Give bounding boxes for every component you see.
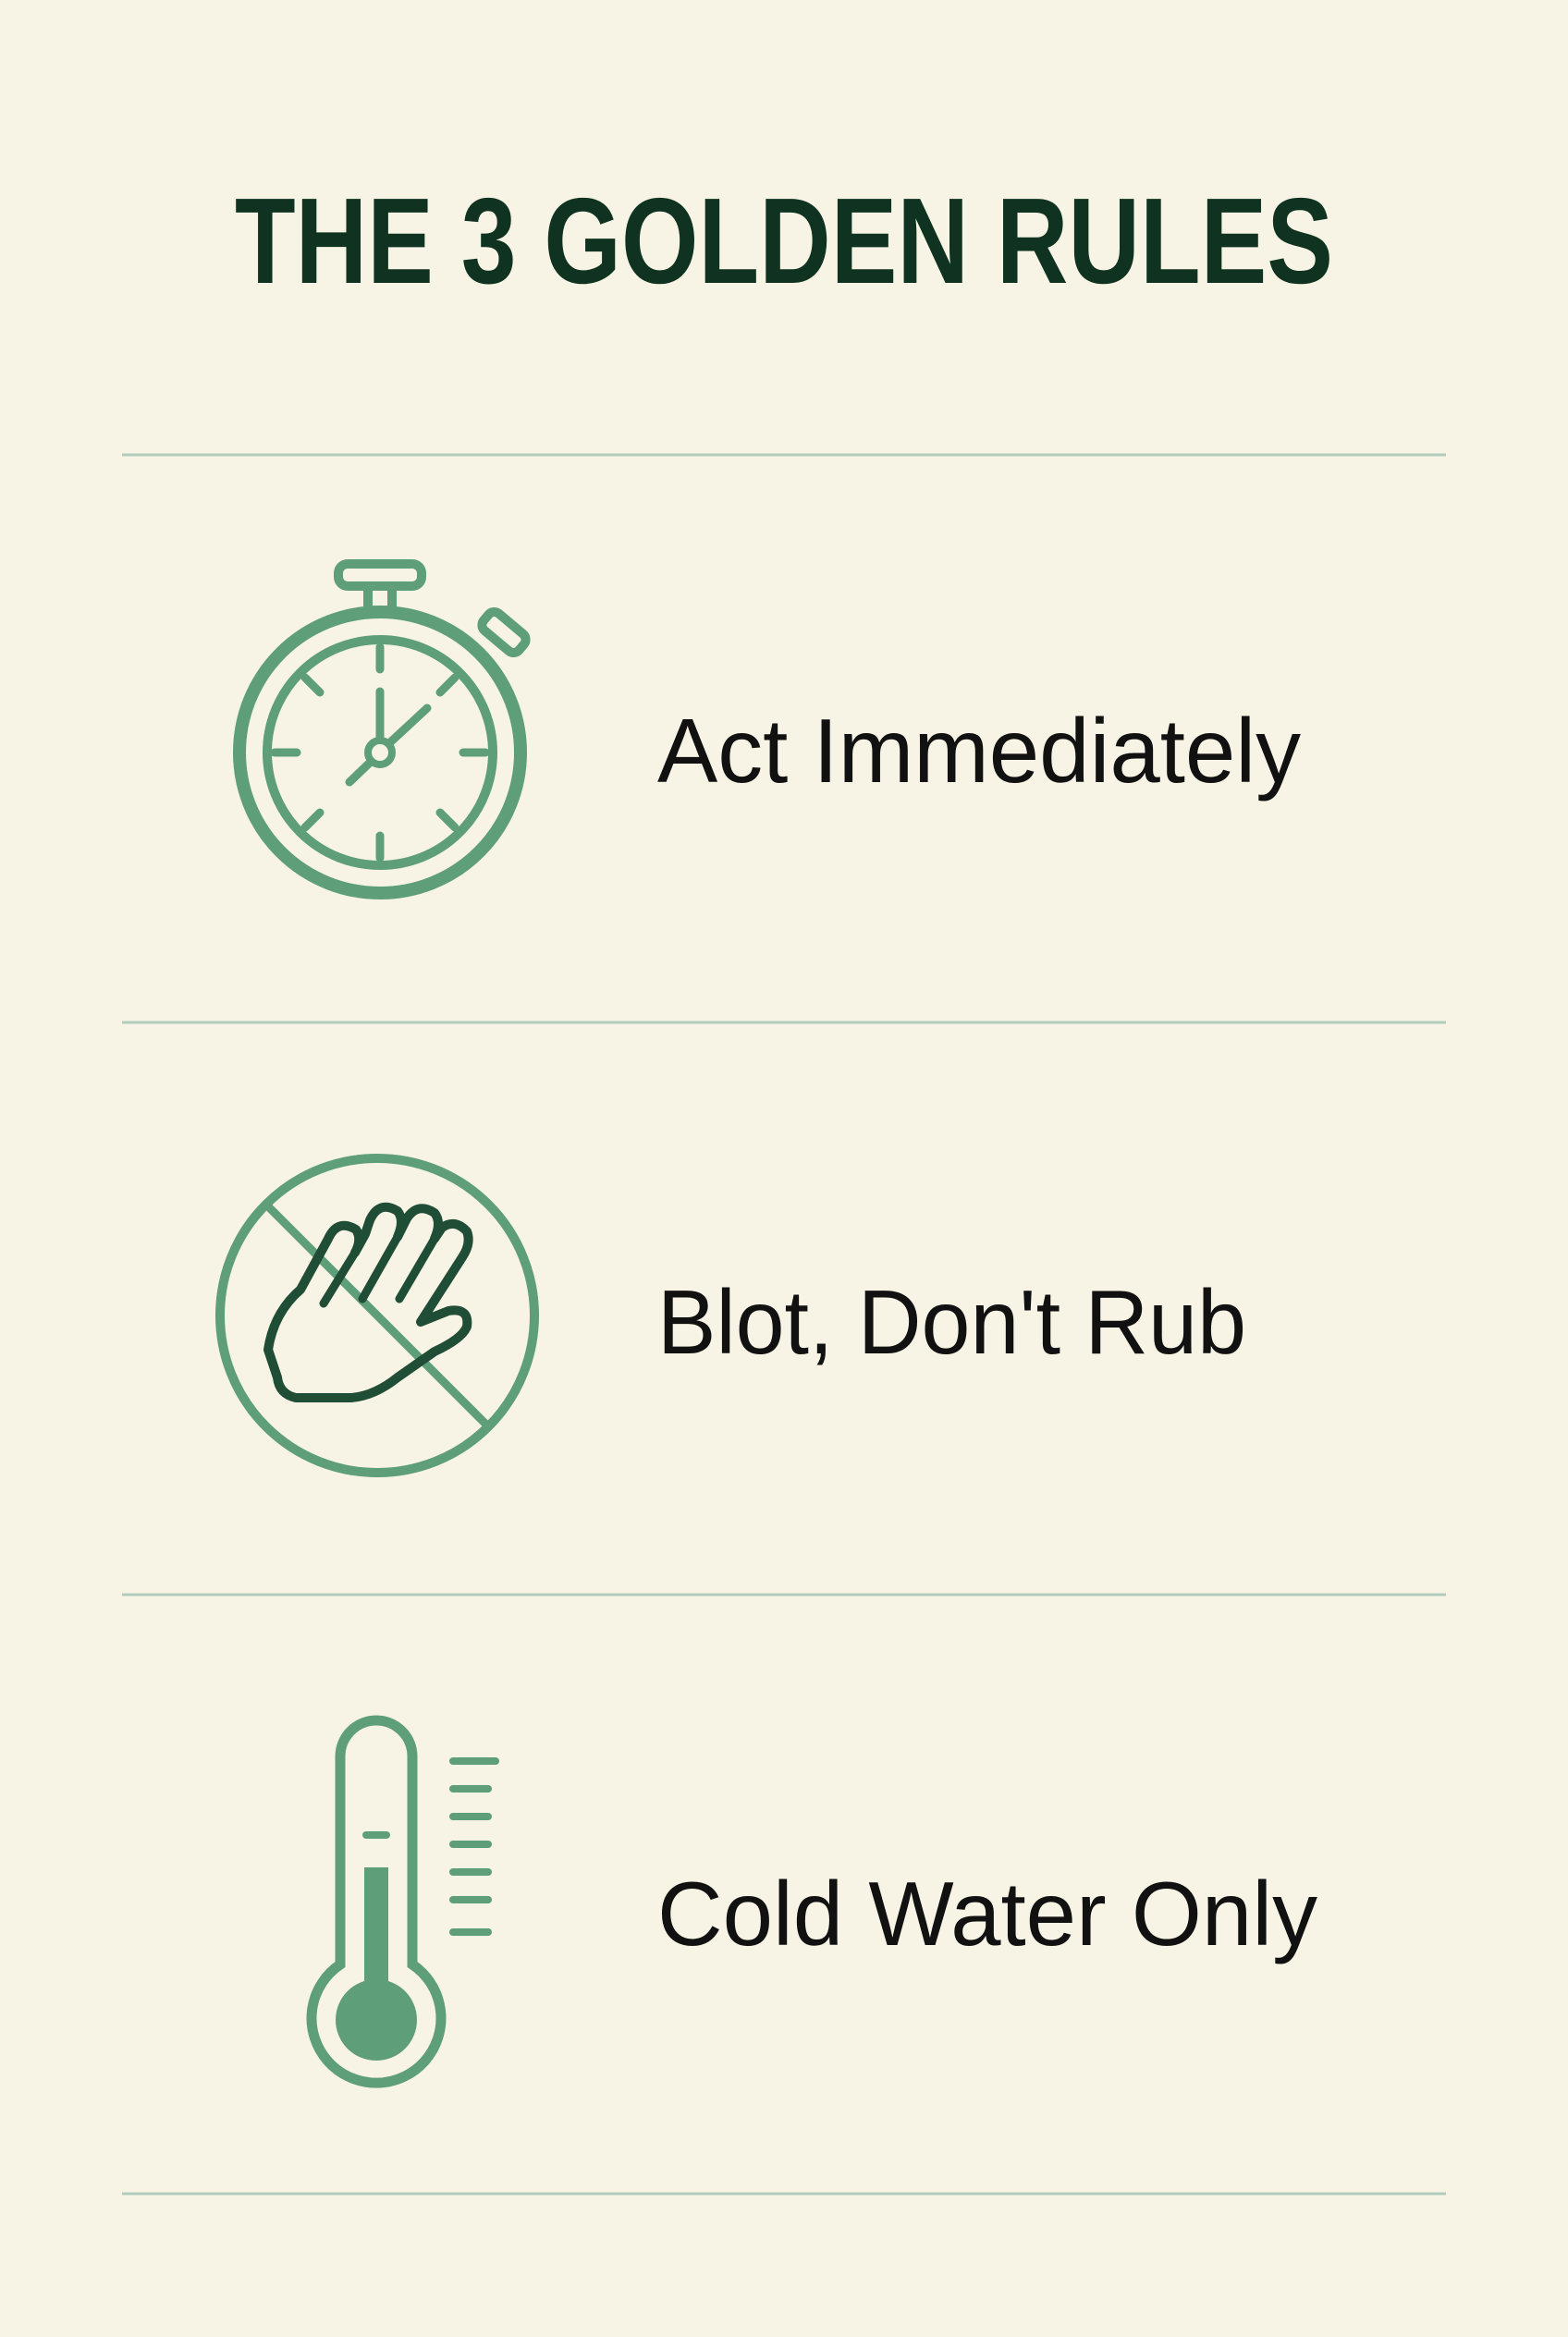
text: blot don't rub: Blot, Don't Rub bbox=[657, 1271, 1246, 1373]
text: cold water only: Cold Water Only bbox=[657, 1863, 1317, 1964]
title: THE 3 GOLDEN RULES bbox=[235, 173, 1333, 309]
icon: thermometer bbox=[312, 1720, 496, 2083]
icon: no rubbing hand bbox=[220, 1158, 534, 1473]
text: act immediately: Act Immediately bbox=[657, 700, 1301, 801]
icon: stopwatch bbox=[239, 564, 529, 893]
